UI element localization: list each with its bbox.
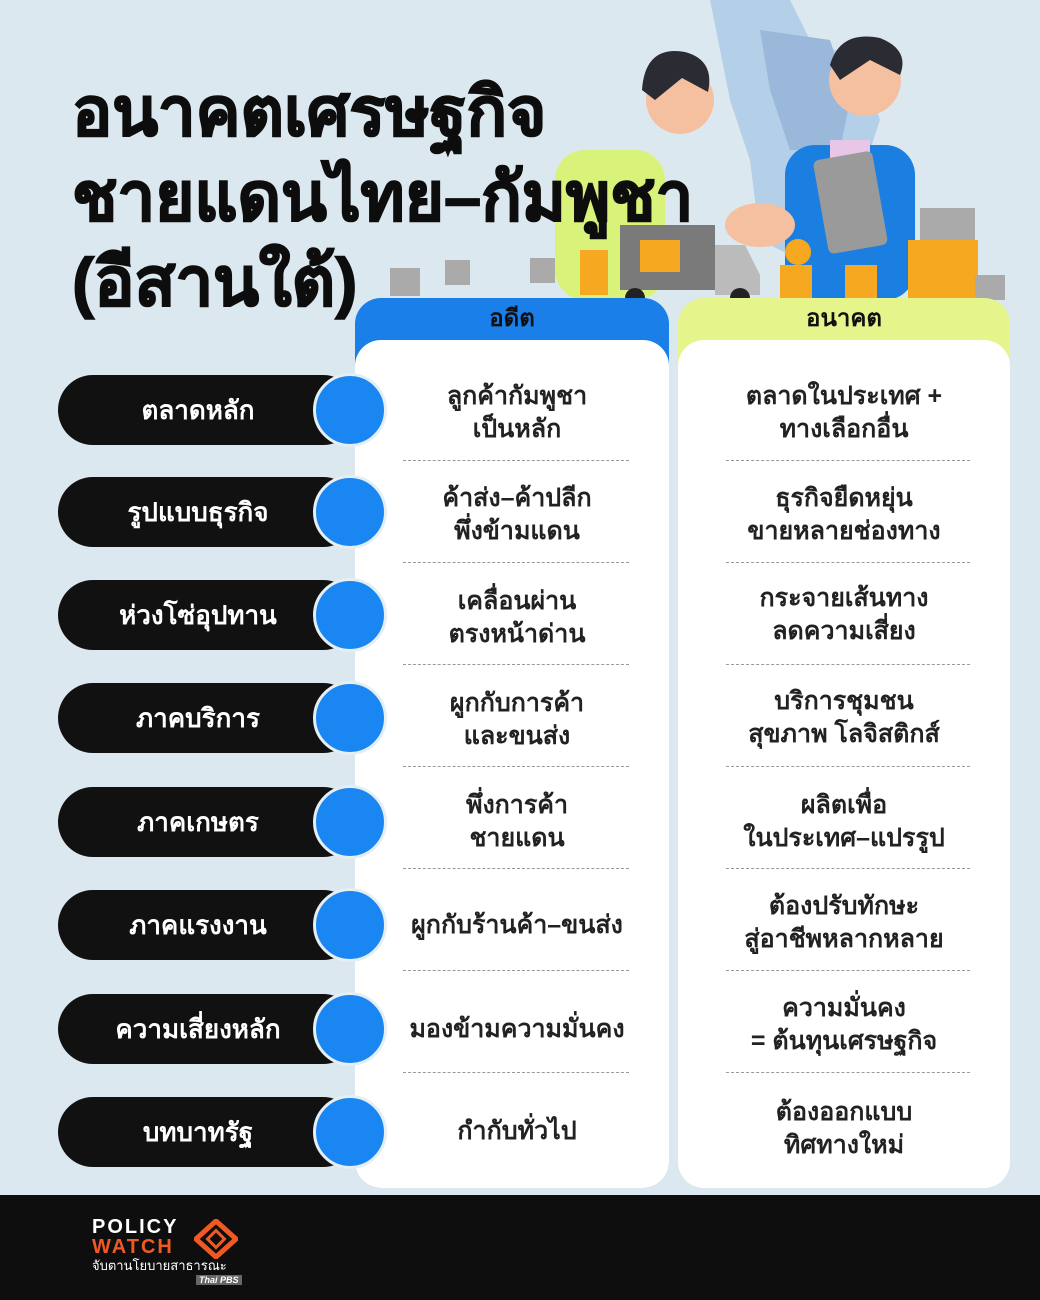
panel: future column [678,298,1010,1188]
panel: past column: ลูกค้ากัมพูชา [447,382,587,410]
label: state role: บทบาทรัฐ [143,1117,253,1147]
panel: future column: ขายหลายช่องทาง [747,517,941,545]
label: business model [58,477,358,547]
panel: past column [355,298,669,1188]
label: main risk [58,994,358,1064]
heading: past: อดีต [489,305,535,332]
panel: future column: ผลิตเพื่อ [801,791,887,819]
label: labour [58,890,358,960]
coins [580,250,608,295]
left man [555,51,714,300]
label: supply chain [58,580,358,650]
title [72,75,693,320]
logo: policy watch: จับตานโยบายสาธารณะ [92,1258,227,1273]
title: อนาคตเศรษฐกิจ [72,75,546,150]
panel: past column: มองข้ามความมั่นคง [409,1014,625,1042]
truck [620,225,760,308]
handshake [725,203,795,247]
panel: future column: กระจายเส้นทาง [760,584,928,612]
label: agriculture: ภาคเกษตร [137,807,259,837]
panel: past column: และขนส่ง [464,722,570,750]
panel: past column: พึ่งการค้า [466,791,568,819]
label: agriculture [58,787,358,857]
title: ชายแดนไทย–กัมพูชา [72,160,693,235]
right man [785,37,915,300]
panel: future column: = ต้นทุนเศรษฐกิจ [751,1027,937,1055]
label: services: ภาคบริการ [136,703,260,733]
panel: past column: เป็นหลัก [473,415,561,443]
panel: past column: ผูกกับการค้า [450,689,584,717]
label: state role [58,1097,358,1167]
illustration: two businessmen shaking hands with goods [390,36,1005,300]
label: supply chain: ห่วงโซ่อุปทาน [119,600,277,630]
label: market: ตลาดหลัก [141,395,255,425]
panel: future column: บริการชุมชน [774,687,914,715]
panel: future column: ธุรกิจยืดหยุ่น [775,484,913,512]
row labels [58,374,387,1168]
panel: future column: ตลาดในประเทศ + [746,382,942,410]
panel: future column: ต้องออกแบบ [776,1098,912,1126]
label: services [58,683,358,753]
title: (อีสานใต้) [72,245,357,320]
panel: past column: กำกับทั่วไป [457,1116,577,1144]
panel: past column: ตรงหน้าด่าน [449,620,585,648]
label: labour: ภาคแรงงาน [129,910,267,940]
logo: policy watch: POLICY [92,1216,178,1238]
panel: past column: ค้าส่ง–ค้าปลีก [442,484,592,512]
label: business model: รูปแบบธุรกิจ [127,497,269,527]
panel: future column: ทางเลือกอื่น [780,415,908,443]
label: market [58,375,358,445]
panel: past column: ชายแดน [469,824,565,852]
logo: policy watch: WATCH [92,1236,174,1258]
panel: future column: สู่อาชีพหลากหลาย [744,925,944,953]
panel: future column: ในประเทศ–แปรรูป [743,824,945,852]
panel: future column: ความมั่นคง [782,994,906,1022]
panel: future column: ลดความเสี่ยง [772,617,916,645]
label: main risk: ความเสี่ยงหลัก [115,1014,281,1044]
panel: past column: พึ่งข้ามแดน [454,517,580,545]
panel: past column: ผูกกับร้านค้า–ขนส่ง [411,910,623,938]
heading: future: อนาคต [806,305,882,332]
footer [0,1195,1040,1300]
panel: past column: เคลื่อนผ่าน [458,587,576,615]
logo: policy watch [92,1216,242,1285]
panel: future column: สุขภาพ โลจิสติกส์ [748,720,940,748]
panel: future column: ต้องปรับทักษะ [769,892,919,920]
illustration: map background [710,0,880,252]
logo: policy watch: Thai PBS [199,1275,239,1285]
boxes [920,208,975,240]
panel: future column: ทิศทางใหม่ [784,1131,904,1159]
